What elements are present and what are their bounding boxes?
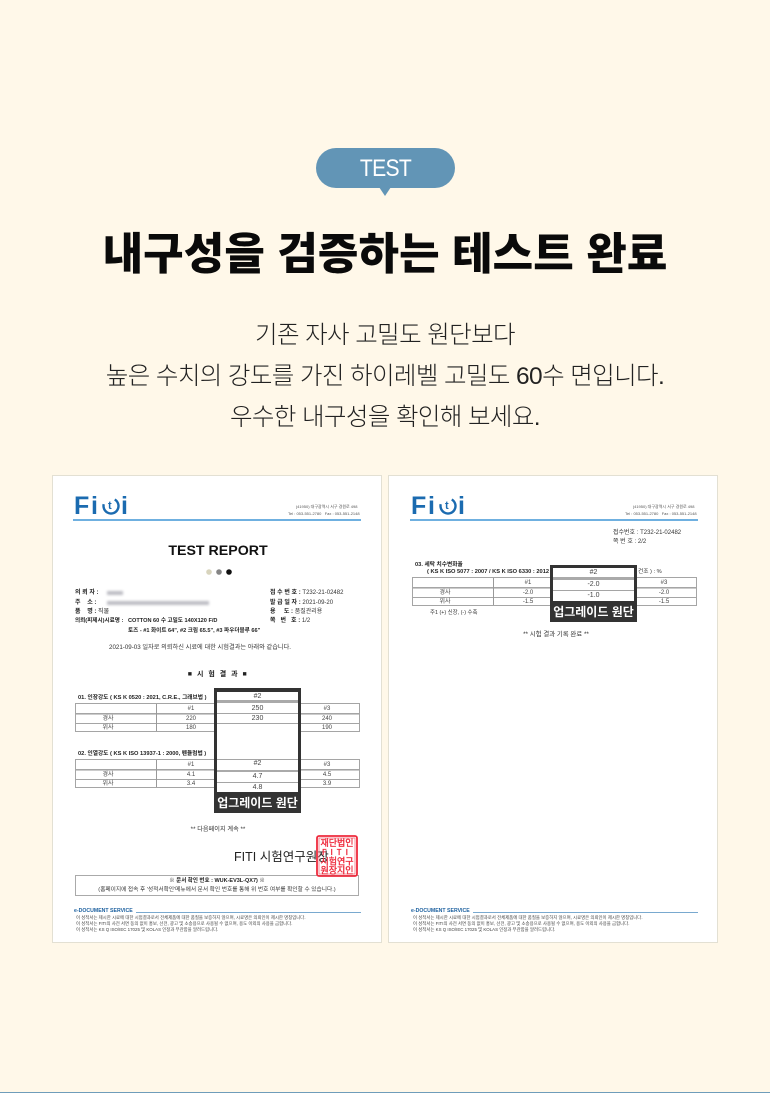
table 01 cells: #3 [324,706,330,712]
table 02 cells: 경사 [102,772,114,778]
three colour dots [206,569,232,575]
signatory: FITI 시험연구원장 [234,850,329,864]
table 01 [75,703,360,732]
end of results note: ** 시험 결과 기록 완료 ** [523,631,589,638]
highlight values: 230 [252,715,263,722]
red seal stamp: 원장지인 [320,864,354,876]
footer heading: e-DOCUMENT SERVICE [411,908,470,914]
table 02 cells: #3 [324,762,330,768]
usage: 용 도 : 품질관리용 [270,609,322,615]
logo: FITI: i [91,492,98,520]
e-document service footer [74,908,361,932]
highlight values: 4.7 [253,773,262,780]
highlight values: 4.8 [253,784,262,791]
report title: TEST REPORT [168,543,268,559]
highlight box: upgraded fabric page 2 [550,565,637,622]
header address: (41950) 대구광역시 서구 경원로 498 Tel : 053-551-2780 Fax : 053-551-2148 [625,504,697,516]
highlight values: #2 [254,760,261,767]
table 02 cells: 3.4 [187,781,195,787]
panel: test report page 2 [388,475,718,943]
drying note: 건조 ) : % [638,569,662,575]
highlight box: upgraded fabric page 1 [214,688,301,813]
table 01 cells: 220 [186,716,196,722]
section 01 heading: 01. 인장강도 ( KS K 0520 : 2021, C.R.E., 그래브법 ) [78,695,206,701]
footer heading: e-DOCUMENT SERVICE [74,908,133,914]
panel: test report page 1 [52,475,382,943]
logo: FITI: t [108,500,112,512]
intro text block [106,322,664,431]
address label: 주 소 : [75,600,96,606]
table 02 cells [102,762,331,787]
section 03 standard: ( KS K ISO 5077 : 2007 / KS K ISO 6330 : 2012 [427,569,549,575]
table 03 [412,577,697,606]
title: 내구성을 검증하는 테스트 완료 [103,218,667,282]
highlight values: -2.0 [587,581,600,588]
table 02 cells: 4.1 [187,772,195,778]
table 03 cells: 위사 [439,599,451,605]
table 03 cells: #1 [525,580,531,586]
verification number: ※ 문서 확인 번호 : WUK-EV3L-QX7) ※ [169,878,265,884]
client label: 의 뢰 자 : [75,590,99,596]
sample name: 의뢰(피제시)시료명 : COTTON 60 수 고밀도 140X120 F/D [75,618,217,624]
intro line 1: 기존 자사 고밀도 원단보다 [255,322,515,349]
highlight values: #2 [590,569,597,576]
table 02 cells: 3.9 [323,781,331,787]
header address: (41950) 대구광역시 서구 경원로 498 Tel : 053-551-2780 Fax : 053-551-2148 [288,504,360,516]
intro line 2: 높은 수치의 강도를 가진 하이레벨 고밀도 60수 면입니다. [106,363,664,390]
highlight values [587,569,600,599]
footer notes: 이 성적서는 제시한 시료에 대한 시험결과로서 전체제품에 대한 품질을 보증하지 않으며, 시료명은 의뢰인이 제시한 명칭입니다. 이 성적서는 FITI의 사전 서면 동의 없이 홍보, 선전, 광고 및 소송용으로 사용될 수 없으며, 용도 이외의 사용을 금합니다. 이 성적서는 KS Q ISO/IEC 17025 및 KOLAS 인정과 무관함을 알려드립니다. [413,915,643,932]
verification box [75,875,359,896]
client information block [75,588,344,634]
table 03 cells: #3 [661,580,667,586]
table 02 cells: #1 [188,762,194,768]
table 01 cells: 190 [322,725,332,731]
highlight values: #2 [254,693,261,700]
logo: FITI: t [445,500,449,512]
table 01 cells: 경사 [102,716,114,722]
logo: FITI: F [411,492,426,520]
table 03 cells [439,580,669,605]
logo: FITI [74,492,128,520]
receipt number: 접수번호 : T232-21-02482 [613,530,681,536]
badge label: TEST [360,155,411,182]
table 03 cells: -2.0 [523,590,533,596]
page number: 쪽 번 호 : 2/2 [613,539,646,545]
intro sentence: 2021-09-03 일자로 의뢰하신 시료에 대한 시험결과는 아래와 같습니다. [109,644,291,651]
table 02 [75,759,360,788]
table 01 cells: 180 [186,725,196,731]
red seal stamp: 재단법인 [320,836,354,849]
logo: FITI: F [74,492,89,520]
highlight values: 250 [252,705,263,712]
table 02 cells: 4.5 [323,772,331,778]
section 03 heading: 03. 세탁 치수변화율 [415,562,463,568]
badge: TEST speech bubble [316,148,455,196]
continued note: ** 다음페이지 계속 ** [191,826,245,833]
red seal stamp [316,835,358,877]
footer notes: 이 성적서는 제시한 시료에 대한 시험결과로서 전체제품에 대한 품질을 보증하지 않으며, 시료명은 의뢰인이 제시한 명칭입니다. 이 성적서는 FITI의 사전 서면 동의 없이 홍보, 선전, 광고 및 소송용으로 사용될 수 없으며, 용도 이외의 사용을 금합니다. 이 성적서는 KS Q ISO/IEC 17025 및 KOLAS 인정과 무관함을 알려드립니다. [76,915,306,932]
highlight label: 업그레이드 원단 [217,796,298,810]
page number: 쪽 번 호 : 1/2 [270,618,310,624]
table 01 cells: #1 [188,706,194,712]
table 03 cells: -1.5 [523,599,533,605]
table 03 cells: -1.5 [659,599,669,605]
section 02 heading: 02. 인열강도 ( KS K ISO 13937-1 : 2000, 펜듈럼법 ) [78,751,206,757]
table 02 cells: 위사 [102,781,114,787]
logo: FITI: i [121,492,128,520]
item label: 품 명 : 직물 [75,609,109,615]
results heading: ■ 시 험 결 과 ■ [188,671,248,678]
sample colours: 토즈 - #1 화이트 64", #2 크림 65.5", #3 파우더블루 66" [128,628,260,634]
shrinkage note: 주1 (+) 신장, (-) 수축 [430,610,477,616]
table 01 cells: 240 [322,716,332,722]
highlight values: -1.0 [587,592,600,599]
highlight label: 업그레이드 원단 [553,605,634,619]
intro line 3: 우수한 내구성을 확인해 보세요. [230,404,540,431]
highlight values [252,693,264,791]
logo: FITI: i [458,492,465,520]
e-document service footer [411,908,698,932]
issue date: 발 급 일 자 : 2021-09-20 [270,600,333,606]
table 01 cells: 위사 [102,725,114,731]
red seal stamp: 시험연구 [320,854,354,868]
table 03 cells: -2.0 [659,590,669,596]
receipt number: 접 수 번 호 : T232-21-02482 [270,590,343,596]
table 03 cells: 경사 [439,590,451,596]
logo: FITI: i [428,492,435,520]
table 01 cells [102,706,332,731]
logo: FITI [411,492,465,520]
red seal stamp: FITI [322,847,352,858]
verification note: (홈페이지에 접속 후 '성적서확인'메뉴에서 문서 확인 번호를 통해 위 번호 여부를 확인할 수 있습니다.) [98,887,336,893]
